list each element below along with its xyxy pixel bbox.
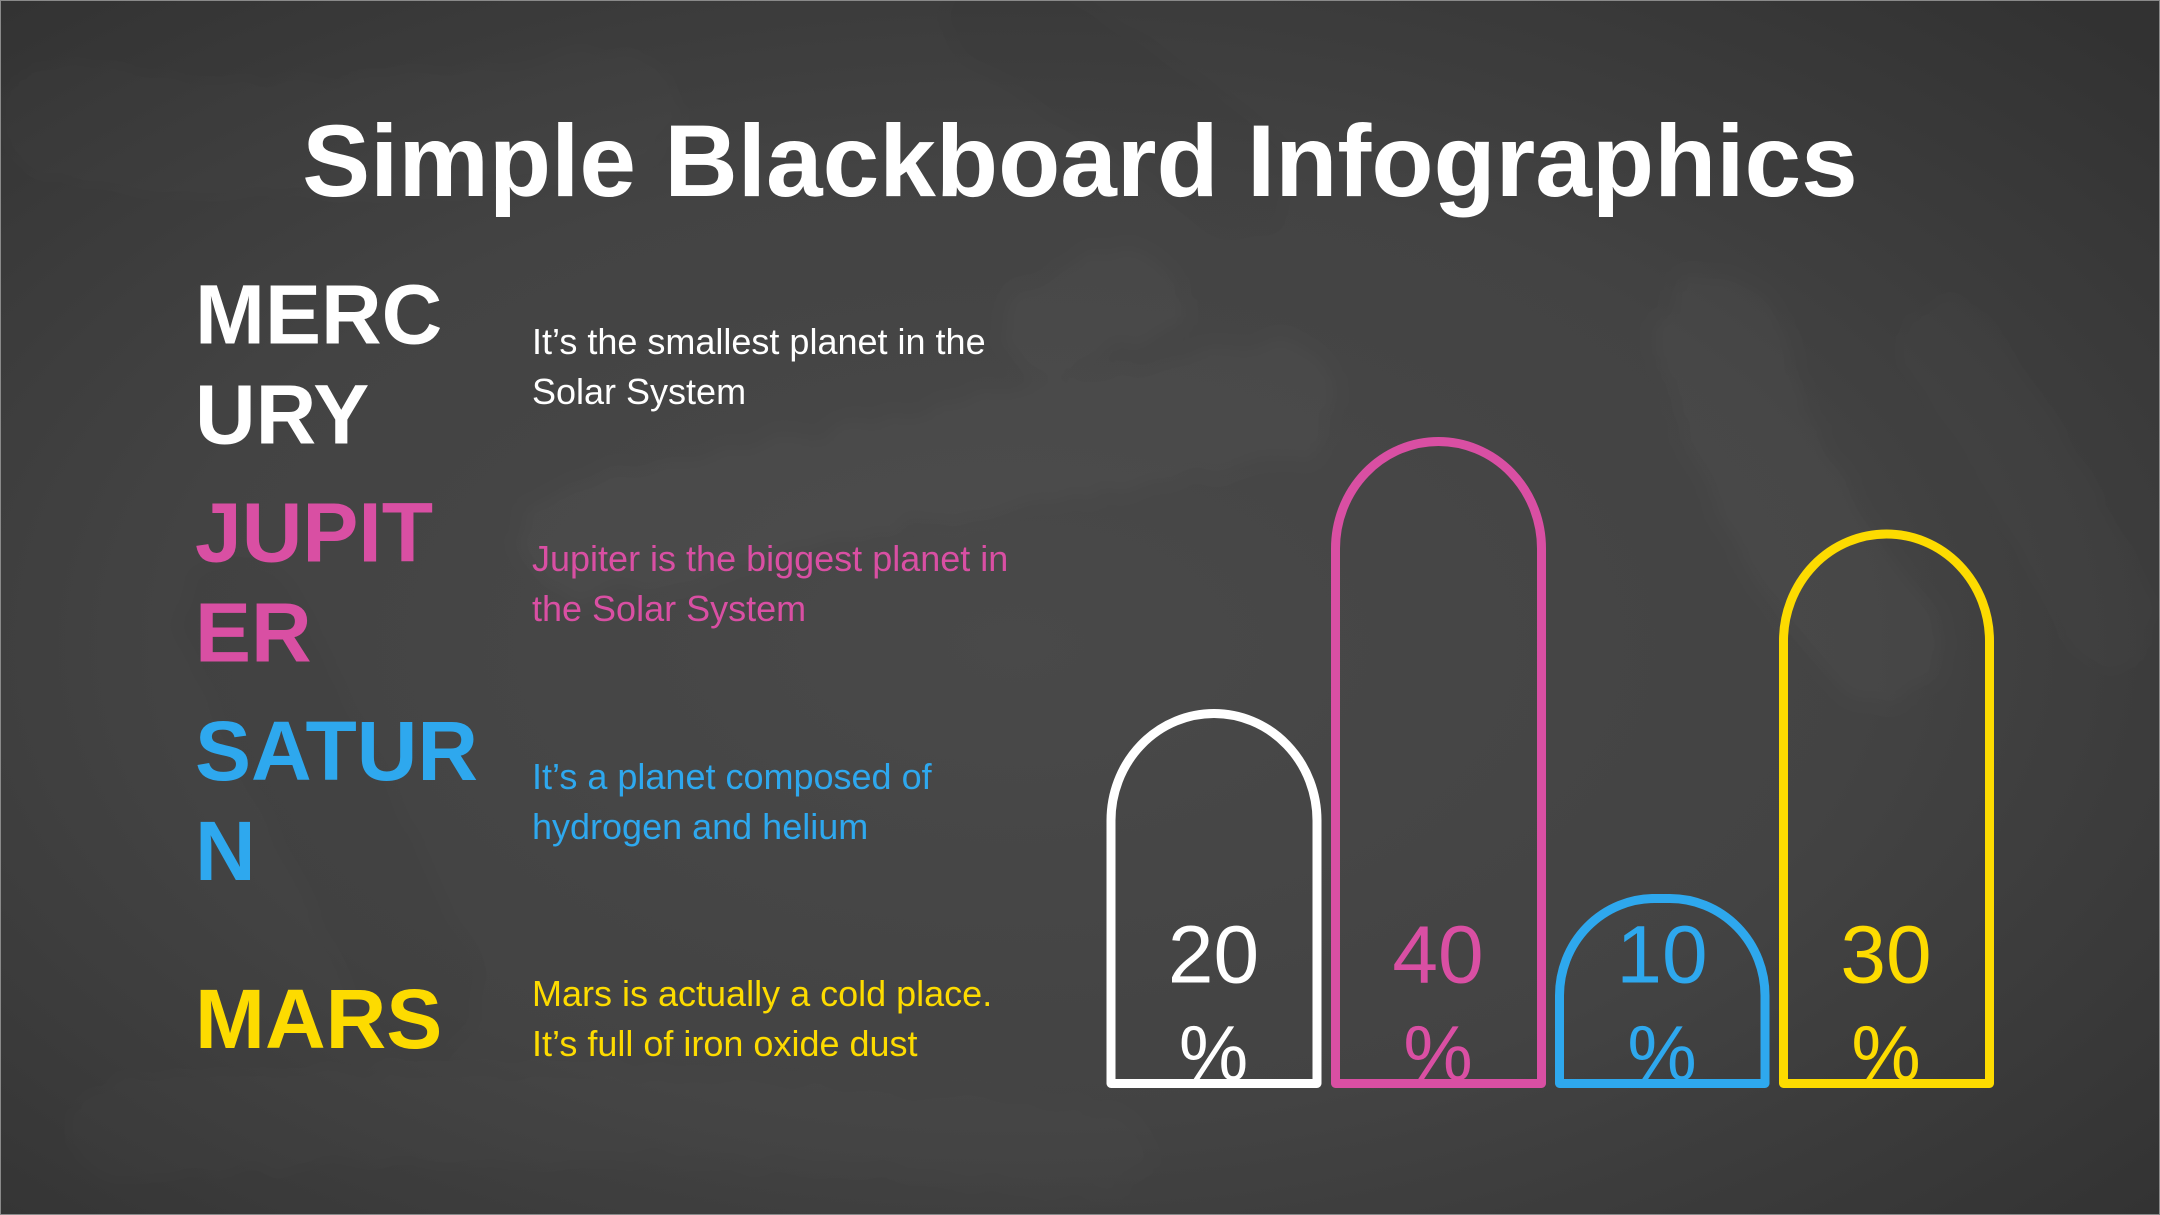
panel: Saturn heading: N [195,804,256,898]
text block: Jupiter description: Jupiter is the biggest planet in [532,538,1008,579]
chart: Mercury bar 20% [1111,713,1317,1097]
panel: Jupiter heading: ER [195,586,312,680]
panel: Mercury heading: URY [195,368,369,462]
chart: Jupiter bar 40% [1336,442,1542,1097]
panel: Mercury heading [195,268,442,462]
panel: Saturn heading: SATUR [195,704,478,798]
chart: Mars bar 30% [1784,534,1990,1097]
panel: Mercury heading: MERC [195,268,442,362]
text block: Jupiter description [532,538,1008,629]
chart: Jupiter bar 40%: 40 [1392,910,1484,1000]
text block: Saturn description [532,756,933,847]
chart: Mercury bar 20%: 20 [1168,910,1259,1000]
text block: Mercury description: It’s the smallest planet in the [532,321,986,362]
chart: Mercury bar 20%: % [1179,1009,1248,1097]
panel: Mars heading: MARS [195,972,442,1066]
text block: Saturn description: hydrogen and helium [532,806,868,847]
chart: Saturn bar 10%: % [1627,1009,1697,1097]
chart: Saturn bar 10%: 10 [1616,910,1708,1000]
title: Simple Blackboard Infographics [302,104,1858,218]
text block: Mars description [532,973,992,1064]
text block: Mercury description [532,321,986,412]
panel: Jupiter heading: JUPIT [195,486,433,580]
panel: Saturn heading [195,704,478,898]
text block: Mars description: Mars is actually a cold place. [532,973,992,1014]
chart: Mars bar 30%: 30 [1840,910,1932,1000]
text block: Mercury description: Solar System [532,371,746,412]
chart: Mars bar 30%: % [1851,1009,1921,1097]
text block: Mars description: It’s full of iron oxide dust [532,1023,918,1064]
panel: Jupiter heading [195,486,433,680]
chart: Jupiter bar 40%: % [1403,1009,1473,1097]
chart: Saturn bar 10% [1560,898,1765,1097]
text block: Saturn description: It’s a planet composed of [532,756,933,797]
text block: Jupiter description: the Solar System [532,588,806,629]
